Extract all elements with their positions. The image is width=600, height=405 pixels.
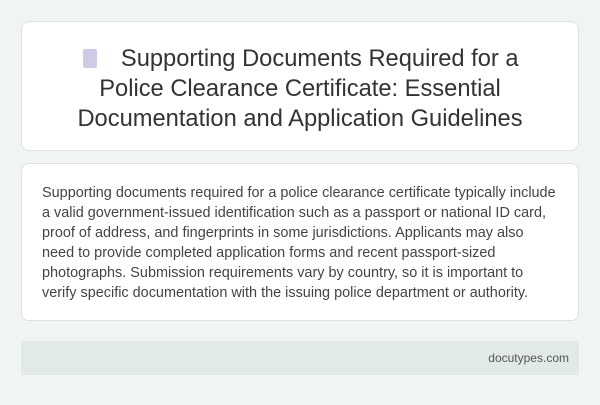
description text: verify specific documentation with the issuing police department or authority.: [42, 285, 528, 301]
title: Police Clearance Certificate: Essential: [99, 76, 501, 102]
title: [77, 46, 523, 132]
description text: [42, 185, 556, 301]
description text: photographs. Submission requirements vary by country, so it is important to: [42, 265, 523, 281]
footer bar: [21, 341, 579, 375]
title: Documentation and Application Guidelines: [77, 106, 523, 132]
title panel: [21, 21, 579, 151]
description panel: [21, 163, 579, 321]
description text: Supporting documents required for a police clearance certificate typically include: [42, 185, 556, 201]
description text: need to provide completed application forms and recent passport-sized: [42, 245, 495, 261]
description text: a valid government-issued identification such as a passport or national ID card,: [42, 205, 546, 221]
footer text: docutypes.com: [488, 351, 569, 365]
description text: proof of address, and fingerprints in some jurisdictions. Applicants may also: [42, 225, 524, 241]
title: Supporting Documents Required for a: [121, 46, 519, 72]
icon: document: [83, 49, 97, 68]
